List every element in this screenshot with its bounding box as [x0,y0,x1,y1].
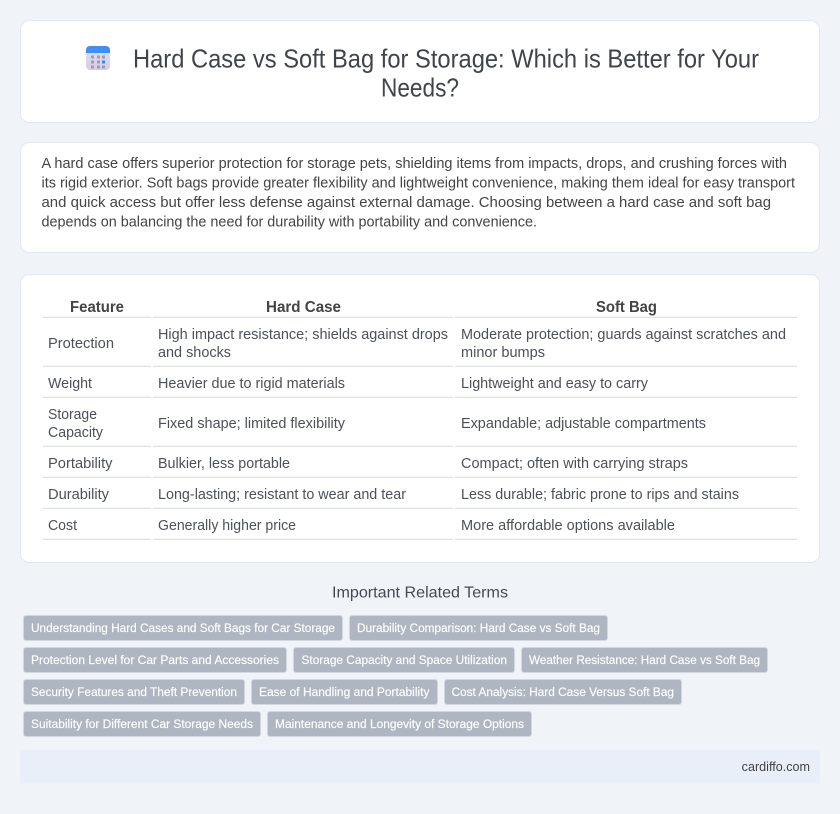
panel: related term tags: Durability Comparison: Hard Case vs Soft Bag [357,621,600,635]
table header [70,299,657,316]
title [133,46,759,102]
table header: Hard Case [266,299,341,316]
row: protection: and shocks [158,345,231,361]
title: Needs? [381,74,459,102]
row: durability: Less durable; fabric prone to rips and stains [461,487,739,503]
table header: Soft Bag [596,299,657,316]
panel: summary paragraph [20,142,820,252]
row: cost [48,518,675,534]
row: cost: Generally higher price [158,518,296,534]
row: storage capacity: Expandable; adjustable compartments [461,416,706,432]
row: protection: Moderate protection; guards against scratches and [461,327,786,343]
table header: Feature [70,299,124,316]
row: weight [48,376,649,392]
panel: summary paragraph: depends on balancing the need for durability with portability and convenience. [42,214,537,230]
row: durability: Durability [48,487,110,503]
row: durability [48,487,739,503]
row: storage capacity [48,407,706,441]
panel: related term tags: Suitability for Different Car Storage Needs [31,717,253,731]
panel: related term tags: Cost Analysis: Hard Case Versus Soft Bag [452,685,674,699]
row: portability: Compact; often with carrying straps [461,456,688,472]
row: cost: Cost [48,518,77,534]
row: storage capacity: Storage [48,407,97,423]
panel: related term tags: Security Features and Theft Prevention [31,685,237,699]
heading: important related terms: Important Related Terms [332,584,508,602]
panel: header [20,20,820,122]
row: protection [48,327,786,361]
row: storage capacity: Fixed shape; limited flexibility [158,416,346,432]
row: portability [48,456,688,472]
title: Hard Case vs Soft Bag for Storage: Which is Better for Your [133,46,759,74]
panel: related term tags: Understanding Hard Cases and Soft Bags for Car Storage [31,621,335,635]
panel: related term tags: Weather Resistance: Hard Case vs Soft Bag [529,653,760,667]
row: weight: Lightweight and easy to carry [461,376,649,392]
row: weight: Heavier due to rigid materials [158,376,345,392]
row: protection: Protection [48,336,114,352]
footer [20,750,820,784]
row: storage capacity: Capacity [48,425,104,441]
icon: calendar [86,46,110,70]
panel: summary paragraph: its rigid exterior. Soft bags provide greater flexibility and lightweight convenience, making them ideal for easy transport [42,176,795,192]
row: portability: Portability [48,456,113,472]
row: cost: More affordable options available [461,518,675,534]
row: weight: Weight [48,376,92,392]
panel: related term tags: Maintenance and Longevity of Storage Options [275,717,524,731]
footer: cardiffo.com [742,760,810,774]
panel: summary paragraph: A hard case offers superior protection for storage pets, shielding items from impacts, drops, and crushing forces with [42,156,787,172]
row: portability: Bulkier, less portable [158,456,290,472]
row: protection: High impact resistance; shields against drops [158,327,448,343]
row: protection: minor bumps [461,345,545,361]
panel: related term tags [24,616,768,736]
panel: summary paragraph: and quick access but offer less defense against external damage. Choosing between a hard case and soft bag [42,195,771,211]
panel: related term tags: Storage Capacity and Space Utilization [302,653,507,667]
row: durability: Long-lasting; resistant to wear and tear [158,487,406,503]
panel: related term tags: Ease of Handling and Portability [259,685,430,699]
panel: comparison table [20,274,820,562]
panel: related term tags: Protection Level for Car Parts and Accessories [31,653,279,667]
